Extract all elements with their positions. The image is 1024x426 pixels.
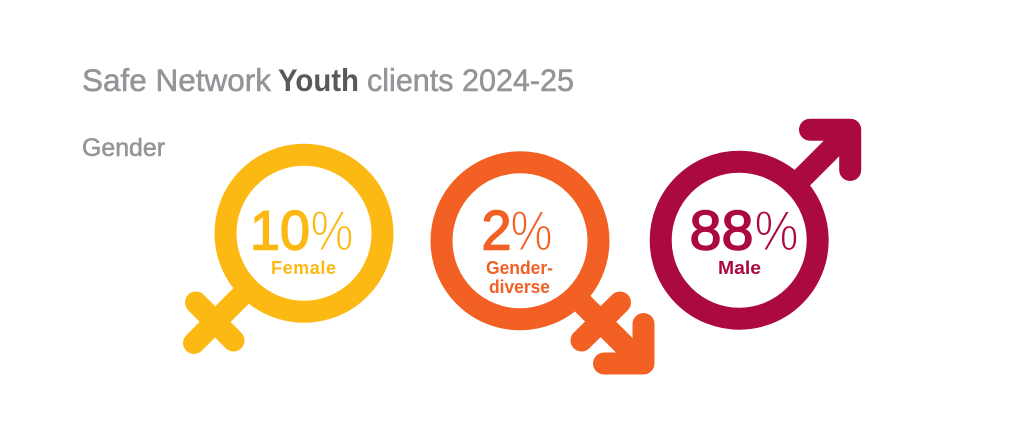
stat: male 88% bbox=[690, 198, 798, 263]
panel: male bbox=[661, 130, 850, 319]
label: male: Male bbox=[718, 258, 761, 278]
stat: gender-diverse 2% bbox=[482, 198, 552, 263]
panel: female bbox=[194, 155, 382, 343]
title: Youth bbox=[278, 62, 359, 98]
label: gender-diverse: diverse bbox=[489, 277, 550, 297]
stat: female 10%: % bbox=[310, 199, 354, 263]
label: gender-diverse: Gender- bbox=[486, 258, 553, 278]
heading: gender: Gender bbox=[82, 134, 165, 162]
stat: gender-diverse 2%: % bbox=[510, 199, 552, 263]
stat: male 88%: 88 bbox=[690, 198, 754, 262]
label: gender-diverse bbox=[486, 258, 553, 297]
stat: gender-diverse 2%: 2 bbox=[482, 198, 512, 262]
icon: gender-diverse symbol bbox=[442, 162, 644, 364]
title: Safe Network bbox=[82, 62, 271, 98]
stat: male 88%: % bbox=[754, 199, 798, 263]
icon: female symbol bbox=[194, 155, 382, 343]
stat: female 10%: 10 bbox=[250, 198, 310, 262]
panel: gender-diverse bbox=[442, 162, 644, 364]
label: female: Female bbox=[271, 258, 336, 278]
stat: female 10% bbox=[250, 198, 354, 263]
title: clients 2024-25 bbox=[367, 62, 574, 98]
icon: male symbol bbox=[661, 130, 850, 319]
title bbox=[82, 62, 574, 98]
